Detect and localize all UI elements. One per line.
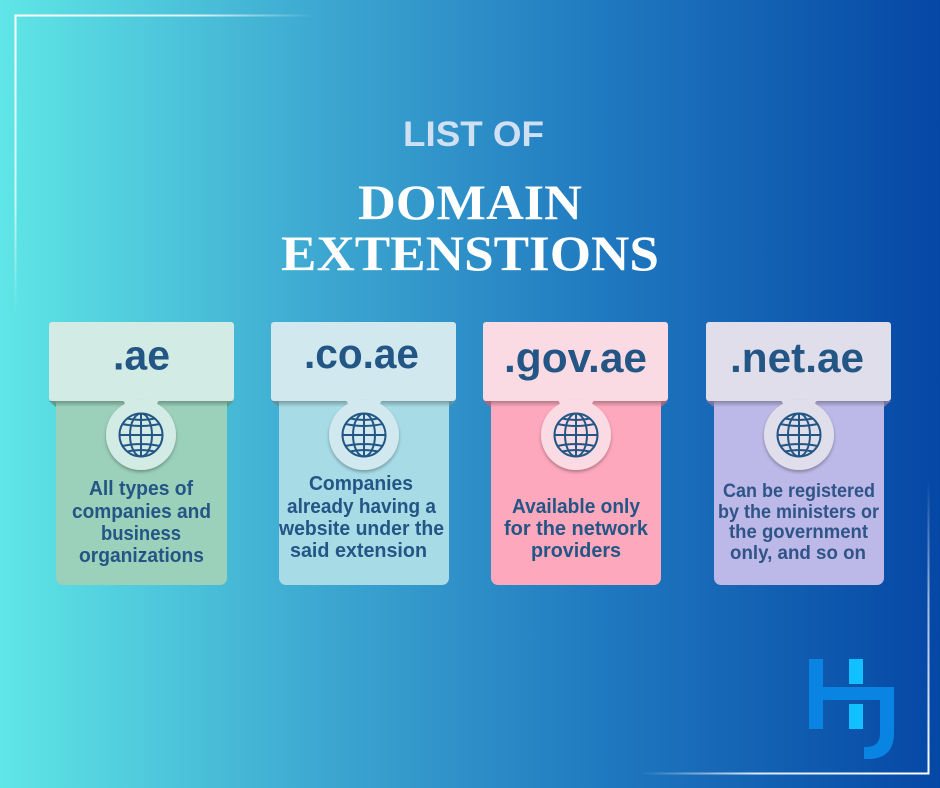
label: .net.ae: .net.ae <box>730 334 864 381</box>
description: .gov.ae: for the network <box>504 518 649 540</box>
description: .co.ae: already having a <box>287 496 437 518</box>
title: DOMAIN EXTENSTIONS <box>281 174 659 281</box>
description: .net.ae: only, and so on <box>730 543 866 564</box>
description: .net.ae: Can be registered <box>723 481 875 502</box>
header: .co.ae <box>271 322 456 401</box>
label: .ae: .ae <box>113 332 170 378</box>
label: .co.ae: .co.ae <box>304 330 419 377</box>
description: .net.ae <box>718 481 880 564</box>
icon: globe <box>764 400 834 470</box>
icon: HJ logo <box>809 659 894 759</box>
icon: globe <box>329 400 399 470</box>
panel: .net.ae <box>706 322 891 585</box>
description: .ae: All types of <box>89 478 193 500</box>
panel: .gov.ae <box>483 322 668 585</box>
description: .co.ae <box>278 473 444 562</box>
description: .ae: companies and <box>72 501 211 523</box>
description: .net.ae: by the ministers or <box>718 502 880 523</box>
description: .gov.ae: providers <box>531 540 621 562</box>
panel: .co.ae <box>271 322 456 585</box>
label: .gov.ae: .gov.ae <box>504 334 647 381</box>
panel: .ae <box>49 322 234 585</box>
header: .gov.ae <box>483 322 668 401</box>
header: .net.ae <box>706 322 891 401</box>
description: .gov.ae <box>504 496 649 562</box>
header: .ae <box>49 322 234 401</box>
description: .net.ae: the government <box>729 522 869 543</box>
description: .ae: business <box>101 523 181 545</box>
description: .co.ae: Companies <box>309 473 413 495</box>
description: .co.ae: website under the <box>278 518 444 540</box>
icon: globe <box>106 400 176 470</box>
title: LIST OF: LIST OF <box>403 115 544 154</box>
description: .gov.ae: Available only <box>512 496 641 518</box>
title: DOMAIN EXTENSTIONS: EXTENSTIONS <box>281 225 659 281</box>
description: .ae <box>72 478 211 567</box>
icon: globe <box>541 400 611 470</box>
description: .co.ae: said extension <box>290 540 427 562</box>
title: DOMAIN EXTENSTIONS: DOMAIN <box>358 174 582 230</box>
description: .ae: organizations <box>79 545 204 567</box>
